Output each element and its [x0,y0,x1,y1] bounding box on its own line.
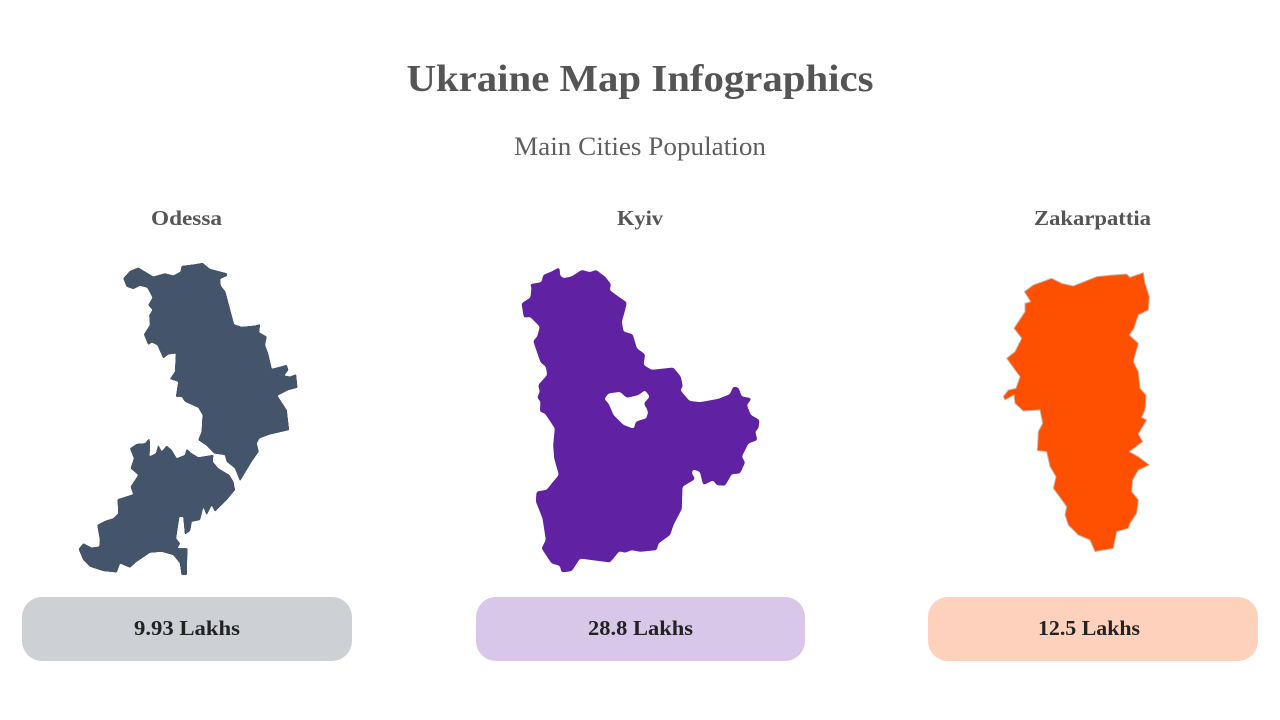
panel: Zakarpattia [928,206,1258,661]
heading: Odessa: Odessa [151,206,223,230]
heading: Zakarpattia: Zakarpattia [1034,206,1152,230]
map: Kyiv region [522,267,759,572]
value pill: Odessa [22,597,352,661]
panel: Odessa [22,206,352,661]
subtitle: Main Cities Population [514,132,766,161]
map: Zakarpattia region [1003,273,1149,552]
value pill: Odessa: 9.93 Lakhs [134,616,240,640]
value pill: Zakarpattia [928,597,1258,661]
map: Odessa region [79,263,297,575]
value pill: Kyiv: 28.8 Lakhs [588,616,693,640]
heading: Kyiv: Kyiv [617,206,664,230]
title: Ukraine Map Infographics [406,58,874,100]
panel: Kyiv [476,206,805,661]
value pill: Zakarpattia: 12.5 Lakhs [1038,616,1140,640]
value pill: Kyiv [476,597,805,661]
